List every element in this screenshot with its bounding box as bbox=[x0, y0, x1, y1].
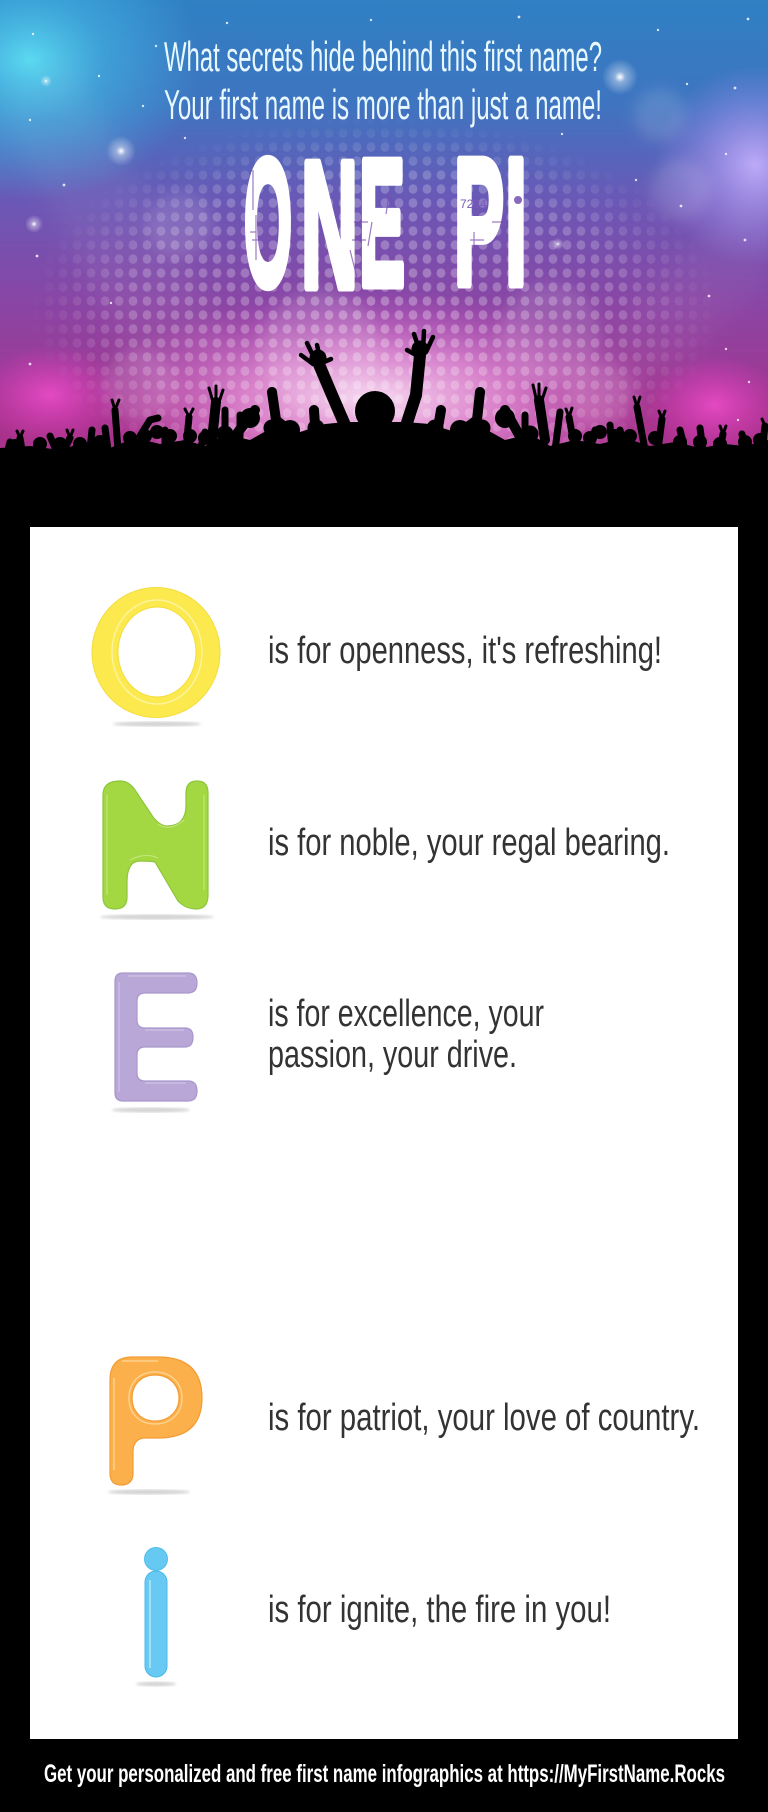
title: name ONE PI bbox=[244, 122, 527, 326]
row: letter I bbox=[136, 1548, 611, 1686]
icon: orange letter P bbox=[108, 1357, 202, 1494]
header background: concert lights bbox=[0, 0, 768, 449]
title: name ONE PI: P bbox=[454, 122, 504, 323]
icon: blue letter i bbox=[136, 1548, 176, 1686]
title: name ONE PI: O bbox=[244, 123, 292, 324]
row: letter N bbox=[100, 781, 670, 920]
sparkles bbox=[25, 16, 750, 421]
heading: two tagline lines bbox=[164, 33, 602, 128]
icon: green letter N bbox=[100, 781, 214, 920]
title: name ONE PI: N bbox=[301, 125, 358, 326]
icon: purple letter E bbox=[112, 973, 197, 1112]
surrounding crowd bbox=[8, 384, 765, 450]
icon: yellow letter O bbox=[92, 588, 220, 726]
crowd silhouette bbox=[0, 331, 768, 528]
title: name ONE PI: 7234 bbox=[460, 197, 487, 211]
row: letter P bbox=[108, 1357, 700, 1494]
text: I bbox=[505, 122, 527, 323]
title: name ONE PI: E bbox=[359, 123, 405, 324]
main figure bbox=[301, 331, 433, 445]
row: letter E bbox=[112, 973, 544, 1112]
text: E meaning bbox=[268, 993, 544, 1076]
row: letter O bbox=[92, 588, 662, 726]
text: O meaning: is for openness, it's refreshing! bbox=[268, 630, 662, 672]
text: E meaning: is for excellence, your bbox=[268, 993, 544, 1035]
text: E meaning: passion, your drive. bbox=[268, 1034, 517, 1076]
text: I meaning: is for ignite, the fire in you! bbox=[268, 1589, 611, 1631]
panel: white letters panel bbox=[30, 527, 738, 1739]
